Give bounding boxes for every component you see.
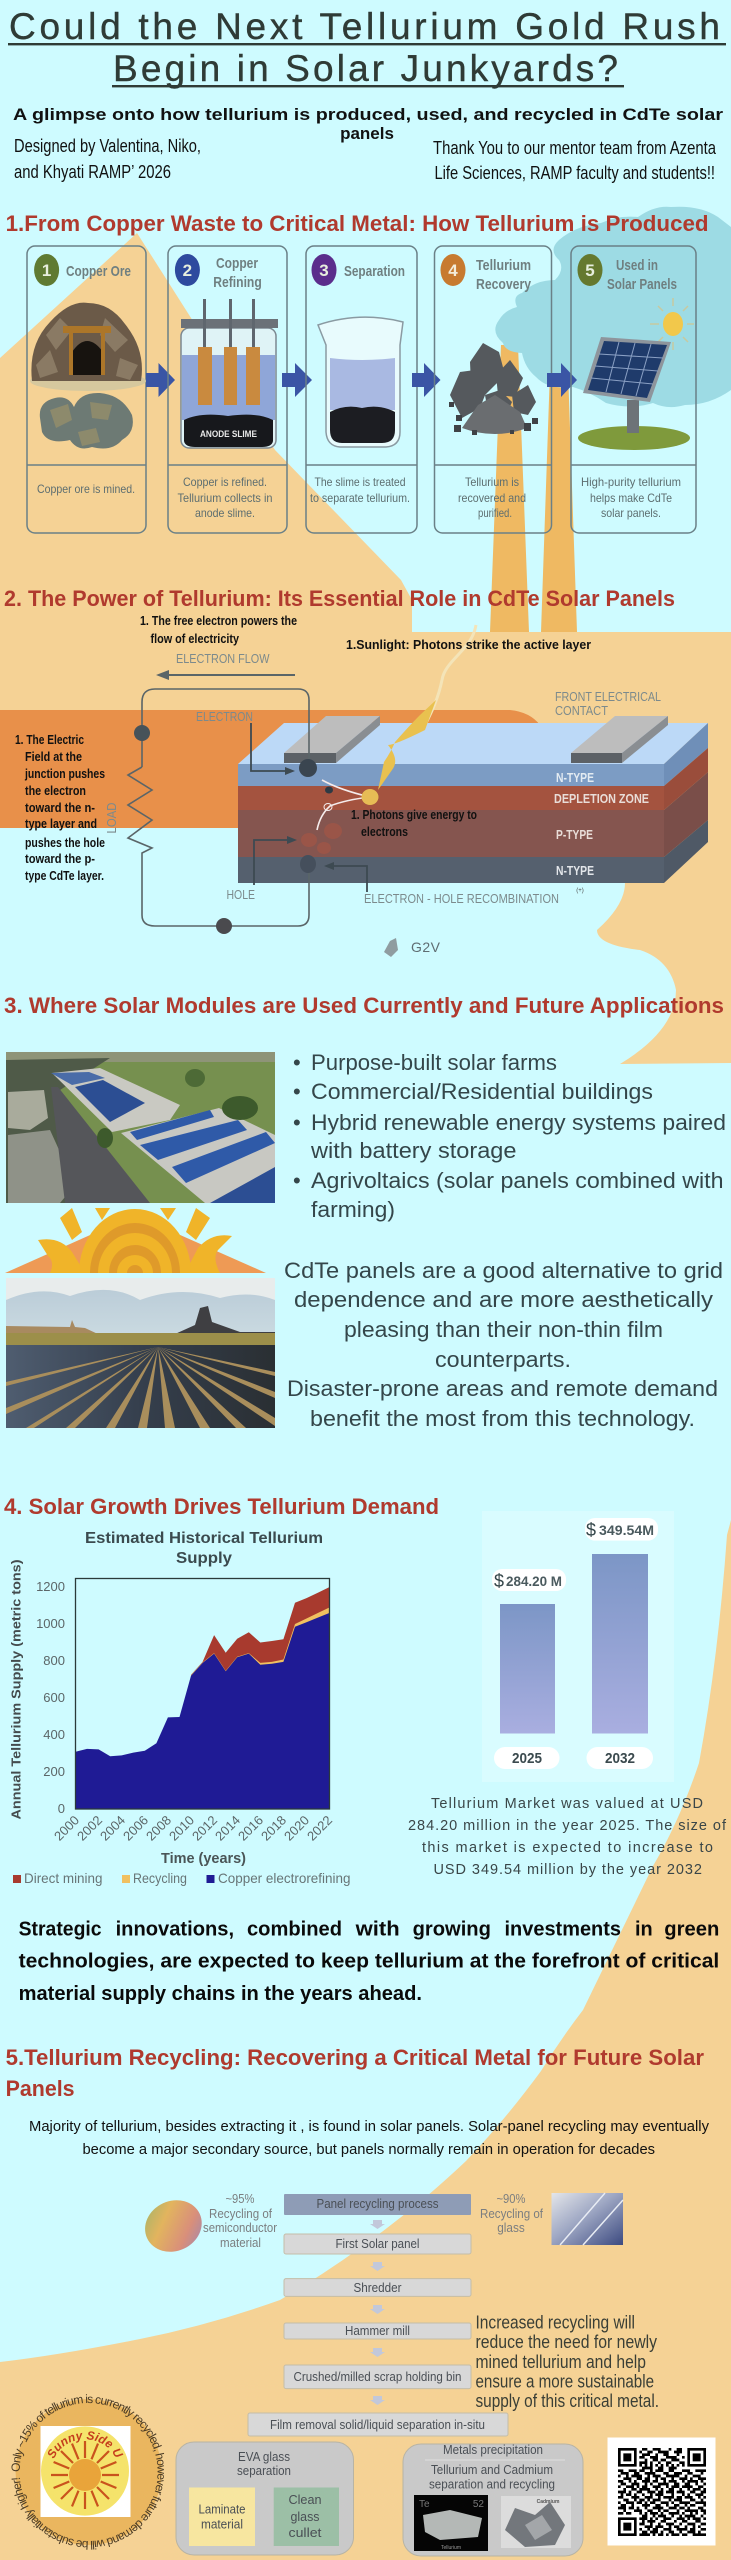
title: Begin in Solar Junkyards? <box>113 48 618 89</box>
text block: CdTe benefits <box>284 1258 723 1431</box>
card captions: helps make CdTe <box>590 491 672 505</box>
external circuit <box>128 689 309 926</box>
legend: Copper electrorefining <box>218 1870 350 1886</box>
card captions: The slime is treated <box>314 475 406 489</box>
card 4: tellurium recovery <box>434 246 552 533</box>
card captions <box>37 475 681 520</box>
area: recycling <box>191 1607 330 1809</box>
year label 2025: 2025 <box>512 1750 542 1767</box>
label: glass recycling: Recycling of <box>480 2206 543 2221</box>
load label: LOAD <box>104 802 119 834</box>
list: applications: Agrivoltaics (solar panels combined with <box>311 1168 724 1193</box>
card 5: used in solar panels: 5 <box>585 261 595 280</box>
bar 2025 <box>500 1604 555 1734</box>
callout: electric field: the electron <box>25 783 86 798</box>
step: shredder <box>284 2279 471 2296</box>
callout: electric field: 1. The Electric <box>15 732 84 747</box>
step: film removal: Film removal solid/liquid separation in-situ <box>270 2417 485 2432</box>
card 4: tellurium recovery: 4 <box>448 261 458 280</box>
text block: recycling benefit: supply of this critical metal. <box>476 2391 659 2411</box>
card captions: purified. <box>478 506 512 520</box>
text block: recycling benefit: ensure a more sustainable <box>476 2372 654 2392</box>
panel: EVA glass separation: Laminate <box>198 2502 246 2517</box>
card captions: Copper is refined. <box>183 475 267 489</box>
text block: CdTe benefits: CdTe panels are a good alternative to grid <box>284 1258 723 1283</box>
label: semiconductor recycling: semiconductor <box>203 2220 278 2235</box>
text block: strategic outlook: investments <box>504 1919 621 1941</box>
card captions: Tellurium is <box>465 475 519 489</box>
card 1: copper ore: Copper Ore <box>66 263 131 280</box>
arrow 2 <box>282 363 312 397</box>
year label 2032 <box>586 1747 653 1769</box>
y-axis labels: 0 <box>58 1801 65 1816</box>
card captions: recovered and <box>458 491 526 505</box>
heading: section 2: 2. The Power of Tellurium: Its Essential Role in CdTe Solar Panels <box>4 586 675 611</box>
card 3: separation <box>306 246 417 533</box>
badge: recycling rate with Sunny Side Up logo <box>11 2394 164 2550</box>
x-axis labels: 2008 <box>143 1813 174 1844</box>
chart title: Supply <box>176 1550 232 1567</box>
year label 2032: 2032 <box>605 1750 635 1767</box>
step: holding bin <box>284 2365 471 2389</box>
card captions: to separate tellurium. <box>310 491 410 505</box>
list: applications: Purpose-built solar farms <box>311 1050 557 1075</box>
x-axis labels: 2006 <box>120 1813 151 1844</box>
heading: section 4: 4. Solar Growth Drives Tellurium Demand <box>4 1494 439 1519</box>
y-axis labels: 400 <box>43 1727 65 1742</box>
step: first solar panel: First Solar panel <box>336 2236 420 2251</box>
panel: EVA glass separation: glass <box>290 2509 320 2524</box>
label: semiconductor recycling: Recycling of <box>209 2206 272 2221</box>
callout: electric field: toward the n- <box>25 800 95 815</box>
layer labels <box>554 689 661 878</box>
step: first solar panel <box>284 2234 471 2254</box>
panel: metals precipitation: Metals precipitation <box>443 2442 543 2457</box>
x-axis labels: 2014 <box>212 1813 243 1844</box>
subtitle: panels <box>340 124 394 143</box>
value label 2025: $ <box>494 1571 504 1591</box>
list: applications: • <box>293 1079 301 1104</box>
photo: rooftop solar on industrial buildings <box>6 1052 275 1203</box>
list: applications <box>293 1050 726 1222</box>
text block: CdTe benefits: Disaster-prone areas and remote demand <box>287 1376 718 1401</box>
x-axis labels <box>51 1813 335 1844</box>
text block: strategic outlook: Strategic <box>19 1919 102 1941</box>
legend <box>13 1870 350 1886</box>
x-axis labels: 2002 <box>74 1813 105 1844</box>
recombination pointer <box>324 862 584 906</box>
text block: strategic outlook: technologies, are expected to keep tellurium at the forefront of critical <box>19 1951 719 1973</box>
heading: section 5 <box>6 2045 704 2101</box>
card 2: copper refining: 2 <box>183 261 192 280</box>
panel: metals precipitation <box>403 2442 583 2556</box>
heading: section 5: 5.Tellurium Recycling: Recovering a Critical Metal for Future Solar <box>6 2045 704 2070</box>
subtitle: A glimpse onto how tellurium is produced, used, and recycled in CdTe solar <box>13 105 723 124</box>
layer labels: N-TYPE <box>556 863 594 878</box>
card 5: used in solar panels <box>571 246 696 533</box>
text block: recycling intro <box>29 2118 709 2158</box>
panel: EVA glass separation: material <box>201 2517 243 2532</box>
panel: metals precipitation: Tellurium and Cadmium <box>431 2462 553 2477</box>
label: glass recycling: ~90% <box>496 2191 526 2206</box>
circuit carriers <box>134 725 232 934</box>
list: applications: • <box>293 1110 301 1135</box>
list: applications: • <box>293 1050 301 1075</box>
arrow 3 <box>412 363 440 397</box>
recombination pointer: ELECTRON - HOLE RECOMBINATION <box>364 891 559 906</box>
card captions: Copper ore is mined. <box>37 482 135 496</box>
chart title <box>85 1530 323 1567</box>
step: film removal <box>248 2413 508 2436</box>
text block: market description: USD 349.54 million by the year 2032 <box>434 1862 702 1878</box>
background: factory chimneys <box>490 345 577 632</box>
electron flow label and arrow <box>156 651 295 680</box>
layer labels: DEPLETION ZONE <box>554 791 649 806</box>
card 2: copper refining: Refining <box>213 274 262 291</box>
area: copper electrorefining <box>76 1613 330 1809</box>
chart title: Estimated Historical Tellurium <box>85 1530 323 1547</box>
electron flow label and arrow: ELECTRON FLOW <box>176 651 270 666</box>
callout: free electron: 1. The free electron powers the <box>140 613 297 628</box>
value label 2025: 284.20 M <box>506 1573 562 1589</box>
electron pointer: ELECTRON <box>196 709 253 724</box>
value label 2032 <box>585 1518 658 1541</box>
x-axis title: Time (years) <box>161 1850 246 1867</box>
layer labels: N-TYPE <box>556 770 594 785</box>
panel: metals precipitation: Tellurium <box>441 2545 461 2551</box>
text block: CdTe benefits: counterparts. <box>435 1347 571 1372</box>
panel: metals precipitation: Cadmium <box>537 2499 560 2505</box>
card 4: tellurium recovery: Tellurium <box>476 257 531 274</box>
text block: strategic outlook: combined <box>247 1919 342 1941</box>
label: glass recycling: glass <box>497 2220 525 2235</box>
layer labels: CONTACT <box>555 703 608 718</box>
diode layers <box>238 723 708 883</box>
card 4: tellurium recovery: Recovery <box>476 276 532 293</box>
label: glass recycling <box>480 2191 543 2235</box>
chart: estimated historical tellurium supply <box>8 1530 350 1886</box>
x-axis labels: 2022 <box>304 1813 335 1844</box>
y-axis title: Annual Tellurium Supply (metric tons) <box>8 1560 24 1820</box>
panel: metals precipitation: 52 <box>473 2499 484 2510</box>
text block: strategic outlook: green <box>664 1919 719 1941</box>
panel: EVA glass separation: cullet <box>288 2525 322 2540</box>
QR code <box>608 2438 716 2546</box>
y-axis labels: 600 <box>43 1690 65 1705</box>
step: hammer mill <box>284 2323 471 2339</box>
background: lower-right peach curve <box>0 1520 731 2560</box>
callout: photons: 1. Photons give energy to <box>351 807 477 822</box>
text block: recycling intro: Majority of tellurium, besides extracting it , is found in solar panels. Solar-panel recycling may eventually <box>29 2118 709 2135</box>
hole pointer <box>226 836 297 902</box>
heading: section 3: 3. Where Solar Modules are Used Currently and Future Applications <box>4 993 724 1018</box>
icon: sun illustration <box>5 1208 266 1273</box>
y-axis labels: 800 <box>43 1653 65 1668</box>
list: applications: Hybrid renewable energy systems paired <box>311 1110 726 1135</box>
callout: electric field: junction pushes <box>24 766 105 781</box>
text block: strategic outlook <box>19 1919 719 2005</box>
panel: tellurium production process <box>27 246 696 533</box>
text block: strategic outlook: growing <box>413 1919 491 1941</box>
card 2: copper refining: Copper <box>216 255 258 272</box>
card 3: separation: Separation <box>344 263 405 280</box>
flow arrows <box>370 2220 385 2405</box>
card 5: used in solar panels: Solar Panels <box>607 276 677 293</box>
icon: glass panel <box>552 2193 623 2245</box>
x-axis labels: 2004 <box>97 1813 128 1844</box>
panel: CdTe solar cell diagram <box>15 613 708 957</box>
G2V logo <box>384 938 441 957</box>
y-axis labels <box>36 1579 65 1816</box>
y-axis labels: 200 <box>43 1764 65 1779</box>
step: panel recycling process <box>284 2194 471 2215</box>
panel: metals precipitation: separation and recycling <box>429 2477 555 2492</box>
callout: sunlight: 1.Sunlight: Photons strike the active layer <box>346 637 591 652</box>
left contact <box>284 716 380 763</box>
text block: strategic outlook: innovations, <box>116 1919 234 1941</box>
right contact <box>571 716 668 763</box>
callout: free electron: flow of electricity <box>150 631 240 646</box>
credits: designers: and Khyati RAMP’ 2026 <box>14 162 171 182</box>
card 1: copper ore: 1 <box>42 261 51 280</box>
circular text: Only ~15% of tellurium is currently recycled, however future demand will be substantially higher! <box>11 2394 164 2550</box>
step: holding bin: Crushed/milled scrap holding bin <box>294 2369 462 2384</box>
text block: strategic outlook: material supply chains in the years ahead. <box>19 1983 422 2005</box>
background: orange band <box>0 710 540 828</box>
layer labels: P-TYPE <box>556 827 593 842</box>
bar 2032 <box>592 1554 648 1734</box>
value label 2032: $ <box>586 1520 596 1540</box>
callout: electric field: type CdTe layer. <box>25 868 104 883</box>
subtitle <box>13 105 723 143</box>
year label 2025 <box>494 1747 560 1769</box>
text block: recycling benefit: mined tellurium and help <box>476 2352 646 2372</box>
label: semiconductor recycling: material <box>220 2235 261 2250</box>
G2V logo: G2V <box>411 939 441 955</box>
x-axis labels: 2020 <box>281 1813 312 1844</box>
step: shredder: Shredder <box>354 2280 402 2295</box>
callout: electric field: Field at the <box>25 749 82 764</box>
step: hammer mill: Hammer mill <box>345 2323 410 2338</box>
panel: recycling flow <box>137 2191 623 2556</box>
area: direct mining <box>191 1587 330 1809</box>
arrow 4 <box>547 363 577 397</box>
card captions: solar panels. <box>601 506 661 520</box>
legend: Direct mining <box>24 1870 102 1886</box>
text block: market description: 284.20 million in the year 2025. The size of <box>408 1818 727 1834</box>
label: semiconductor recycling <box>203 2191 278 2250</box>
value label 2025 <box>492 1569 566 1591</box>
sunlight beam <box>378 625 476 790</box>
text block: recycling benefit <box>476 2313 659 2411</box>
text block: market description <box>408 1796 727 1878</box>
title: Could the Next Tellurium Gold Rush <box>9 6 720 47</box>
photo: desert solar farm <box>6 1278 275 1428</box>
list: applications: with battery storage <box>310 1138 516 1163</box>
label: semiconductor recycling: ~95% <box>226 2191 255 2206</box>
callout: free electron <box>140 613 297 646</box>
panel: metals precipitation: Te <box>419 2499 430 2510</box>
text block: strategic outlook: in <box>635 1919 653 1941</box>
x-axis labels: 2012 <box>189 1813 220 1844</box>
callout: electric field: type layer and <box>25 816 97 831</box>
panel: EVA glass separation: Clean <box>288 2492 322 2507</box>
title <box>8 6 726 89</box>
chart: market value bars <box>482 1511 674 1782</box>
text block: CdTe benefits: benefit the most from this technology. <box>310 1406 695 1431</box>
layer labels: FRONT ELECTRICAL <box>555 689 661 704</box>
arrow 1 <box>146 363 175 397</box>
card captions: High-purity tellurium <box>581 475 681 489</box>
heading: section 1: 1.From Copper Waste to Critical Metal: How Tellurium is Produced <box>6 211 709 236</box>
list: applications: Commercial/Residential buildings <box>311 1079 653 1104</box>
background: smoke cloud <box>495 207 731 407</box>
panel: EVA glass separation: EVA glass <box>238 2449 290 2464</box>
text block: recycling benefit: reduce the need for newly <box>476 2332 657 2352</box>
card 3: separation: 3 <box>319 261 329 280</box>
chart frame <box>76 1578 330 1809</box>
callout: electric field: pushes the hole <box>25 835 105 850</box>
background: peach landscape <box>0 233 731 1064</box>
heading: section 5: Panels <box>6 2076 75 2101</box>
text block: market description: Tellurium Market was valued at USD <box>431 1796 703 1812</box>
callout: electric field: toward the p- <box>25 851 95 866</box>
callout: photons <box>351 807 477 839</box>
hole pointer: HOLE <box>226 887 255 902</box>
card 2: copper refining: ANODE SLIME <box>200 429 257 439</box>
text block: strategic outlook: with <box>355 1919 400 1941</box>
x-axis labels: 2018 <box>258 1813 289 1844</box>
panel: EVA glass separation: separation <box>237 2463 291 2478</box>
card 1: copper ore <box>27 246 146 533</box>
x-axis labels: 2010 <box>166 1813 197 1844</box>
text block: recycling intro: become a major secondary source, but panels normally remain in operation for decades <box>82 2141 655 2158</box>
icon: semiconductor wafer <box>137 2191 210 2261</box>
card captions: Tellurium collects in <box>178 491 272 505</box>
charge carriers in the cell <box>299 759 378 873</box>
value label 2032: 349.54M <box>599 1522 654 1538</box>
card captions: anode slime. <box>195 506 255 520</box>
text block: market description: this market is expected to increase to <box>422 1840 713 1856</box>
y-axis labels: 1200 <box>36 1579 65 1594</box>
recombination pointer: (+) <box>576 888 584 894</box>
legend: Recycling <box>133 1870 187 1886</box>
x-axis labels: 2016 <box>235 1813 266 1844</box>
list: applications: • <box>293 1168 301 1193</box>
panel: EVA glass separation <box>176 2442 354 2555</box>
text block: recycling benefit: Increased recycling will <box>476 2313 635 2333</box>
list: applications: farming) <box>311 1197 395 1222</box>
credits: designers: Designed by Valentina, Niko, <box>14 136 201 156</box>
credits: thanks <box>433 138 717 183</box>
step: panel recycling process: Panel recycling process <box>316 2196 439 2211</box>
card 2: copper refining <box>168 246 287 533</box>
callout: electric field <box>15 732 105 883</box>
text block: CdTe benefits: pleasing than their non-thin film <box>344 1317 663 1342</box>
electron pointer <box>196 709 295 775</box>
credits: designers <box>14 136 201 182</box>
text block: CdTe benefits: dependence and are more aesthetically <box>294 1287 713 1312</box>
y-axis labels: 1000 <box>36 1616 65 1631</box>
x-axis labels: 2000 <box>51 1813 82 1844</box>
card 5: used in solar panels: Used in <box>616 257 658 274</box>
callout: photons: electrons <box>361 824 408 839</box>
